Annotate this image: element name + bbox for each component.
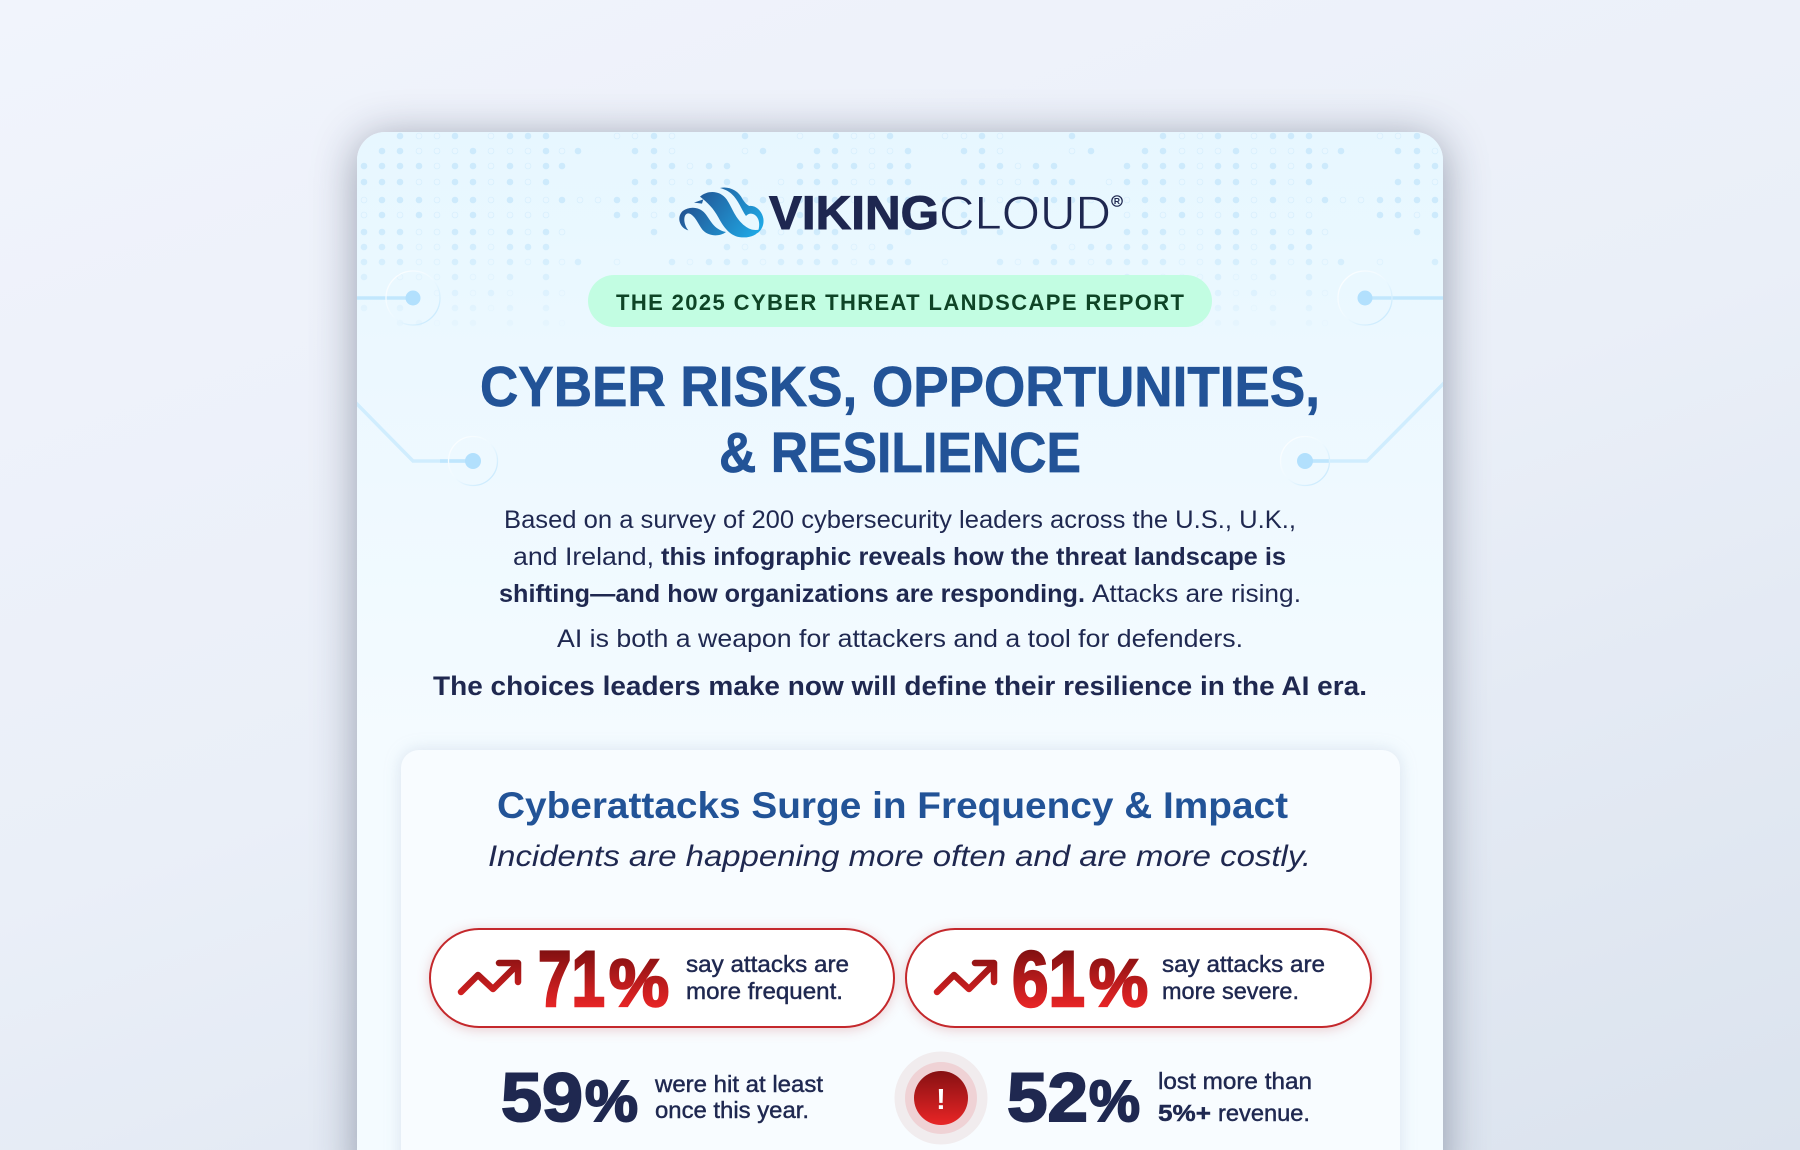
main title: & RESILIENCE <box>719 421 1081 485</box>
label <box>686 951 849 1004</box>
stat: 59% <box>501 1059 824 1136</box>
label: more severe. <box>1162 978 1299 1004</box>
panel heading: Cyberattacks Surge in Frequency & Impact <box>497 785 1288 826</box>
icon: alert: ! <box>936 1084 946 1116</box>
main title <box>480 355 1320 485</box>
panel subheading: Incidents are happening more often and are more costly. <box>488 840 1311 873</box>
wordmark: R <box>1114 196 1120 206</box>
circuit decoration: left <box>354 271 498 486</box>
stat: 52%: 52 <box>1007 1059 1088 1136</box>
wordmark: VIKING <box>769 186 939 239</box>
stat: 52%: lost more than <box>1158 1068 1312 1094</box>
intro paragraph: shifting—and how organizations are responding. <box>499 580 1085 608</box>
stat: 59%: once this year. <box>655 1097 809 1123</box>
intro paragraph: and Ireland, <box>513 543 654 571</box>
report tag pill <box>588 275 1212 327</box>
key takeaway line: The choices leaders make now will define their resilience in the AI era. <box>433 671 1367 701</box>
stat pill: 71% <box>430 929 894 1027</box>
main title: CYBER RISKS, OPPORTUNITIES, <box>480 355 1320 419</box>
intro paragraph: this infographic reveals how the threat landscape is <box>661 543 1286 571</box>
intro paragraph <box>499 506 1301 653</box>
report tag pill: THE 2025 CYBER THREAT LANDSCAPE REPORT <box>616 290 1185 315</box>
value <box>1012 934 1148 1023</box>
label <box>1162 951 1325 1004</box>
intro paragraph: Attacks are rising. <box>1092 580 1301 608</box>
report card <box>357 132 1443 1150</box>
icon: cloud waves <box>679 187 764 237</box>
panel: cyberattacks surge <box>401 750 1400 1150</box>
value: 61 <box>1012 934 1085 1023</box>
icon: trend arrow <box>461 963 518 992</box>
intro paragraph: Based on a survey of 200 cybersecurity leaders across the U.S., U.K., <box>504 506 1296 534</box>
stat: 59%: 59 <box>501 1059 583 1136</box>
stat: 52%: % <box>1089 1069 1140 1134</box>
wordmark: CLOUD <box>939 186 1111 239</box>
stat: 59%: were hit at least <box>654 1071 824 1097</box>
background dot pattern <box>360 132 1438 311</box>
wordmark <box>769 186 1122 239</box>
icon: alert <box>894 1052 988 1144</box>
stat pill: 61% <box>906 929 1371 1027</box>
intro paragraph: AI is both a weapon for attackers and a tool for defenders. <box>557 625 1243 653</box>
value: 71 <box>538 934 605 1023</box>
label: say attacks are <box>686 951 849 977</box>
value: % <box>1089 946 1148 1021</box>
label: say attacks are <box>1162 951 1325 977</box>
circuit decoration: right <box>1280 271 1447 486</box>
label: more frequent. <box>686 978 843 1004</box>
logo <box>679 186 1122 239</box>
value: % <box>609 946 669 1021</box>
stat: 52% <box>1007 1059 1312 1136</box>
value <box>538 934 669 1023</box>
stat: 52%: 5%+ <box>1158 1100 1211 1126</box>
stat: 59%: % <box>585 1069 638 1134</box>
stat: 52%: revenue. <box>1218 1100 1310 1126</box>
icon: trend arrow <box>937 963 994 992</box>
